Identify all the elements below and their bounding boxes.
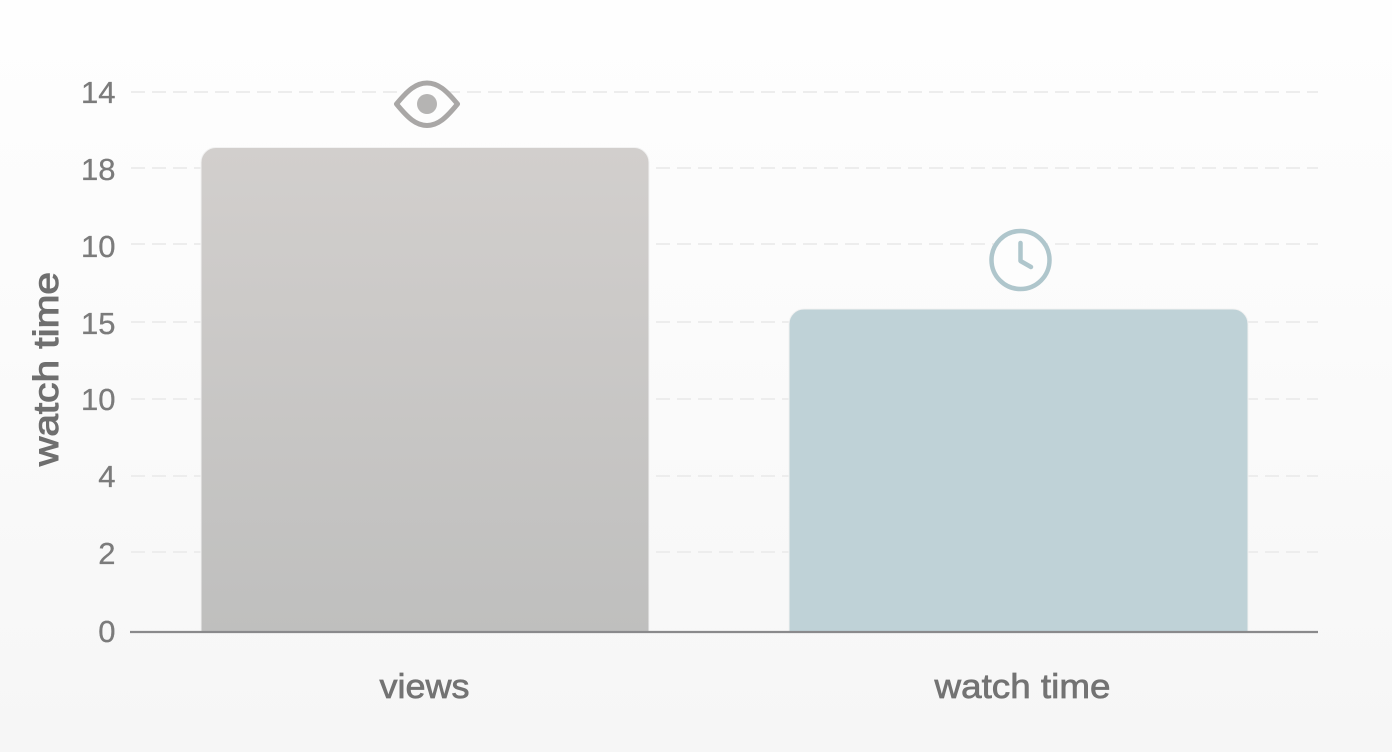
x label: views: views <box>380 668 470 706</box>
y axis tick labels: 2 <box>98 536 116 571</box>
icon: eye <box>396 83 458 126</box>
y axis tick labels: 0 <box>98 614 116 649</box>
y axis tick labels <box>81 75 116 649</box>
y axis tick labels: 14 <box>81 75 116 110</box>
x axis line <box>130 631 1318 633</box>
icon: clock <box>992 231 1050 289</box>
y axis tick labels: 15 <box>81 306 116 341</box>
y axis title: watch time <box>27 272 66 467</box>
bar: watch time <box>789 309 1248 632</box>
y axis tick labels: 10 <box>81 229 116 264</box>
y axis tick labels: 10 <box>81 382 116 417</box>
x label: watch time: watch time <box>933 668 1110 706</box>
bar: views <box>201 148 649 632</box>
y axis tick labels: 4 <box>98 459 116 494</box>
y axis tick labels: 18 <box>81 152 116 187</box>
